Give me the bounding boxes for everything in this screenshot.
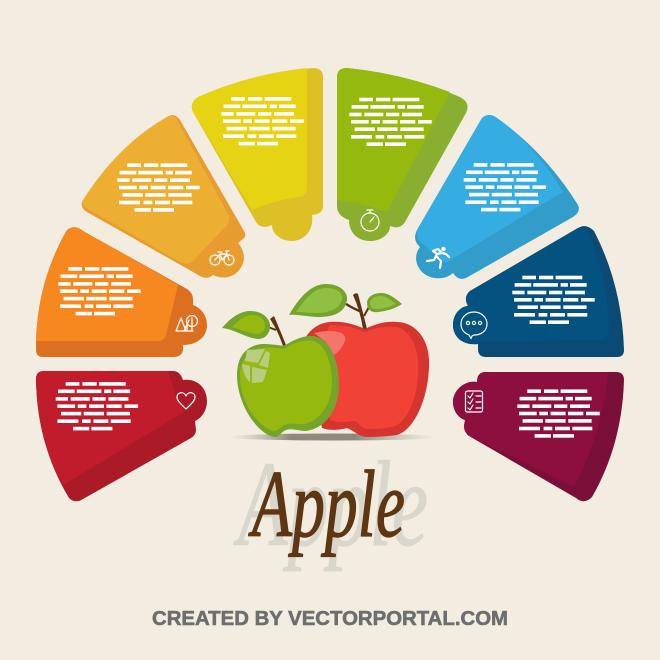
icon: checklist <box>466 391 482 412</box>
panel: red heart segment <box>36 371 207 501</box>
text block: amber <box>117 163 200 212</box>
illustration: apples <box>222 284 438 440</box>
icon: runner <box>427 247 449 268</box>
panel: yellow segment <box>192 68 323 241</box>
text block: green <box>349 98 432 146</box>
text block: blue <box>464 163 546 211</box>
footer credit: CREATED BY VECTORPORTAL.COM <box>152 607 508 630</box>
icon: heart <box>177 393 195 409</box>
icon: bicycle <box>210 251 234 265</box>
green apple <box>222 311 339 437</box>
red apple <box>222 284 429 437</box>
panel: orange trees segment <box>36 227 207 357</box>
panel: maroon checklist segment <box>453 372 624 501</box>
title shadow: Apple <box>233 437 428 572</box>
text block: red <box>56 382 138 430</box>
text block: orange <box>58 267 141 315</box>
panel: navy chat segment <box>453 226 624 357</box>
text block: yellow <box>221 97 304 145</box>
apple shadow <box>228 434 438 440</box>
icon: speech bubble <box>461 312 487 338</box>
panel: blue runner segment <box>415 115 579 279</box>
panel: green stopwatch segment <box>337 68 468 241</box>
text block: navy <box>512 276 595 324</box>
title: Apple <box>248 451 405 557</box>
panel: amber bicycle segment <box>82 115 245 278</box>
text block: maroon <box>517 389 600 438</box>
icon: stopwatch <box>361 210 379 231</box>
icon: trees <box>176 316 198 331</box>
